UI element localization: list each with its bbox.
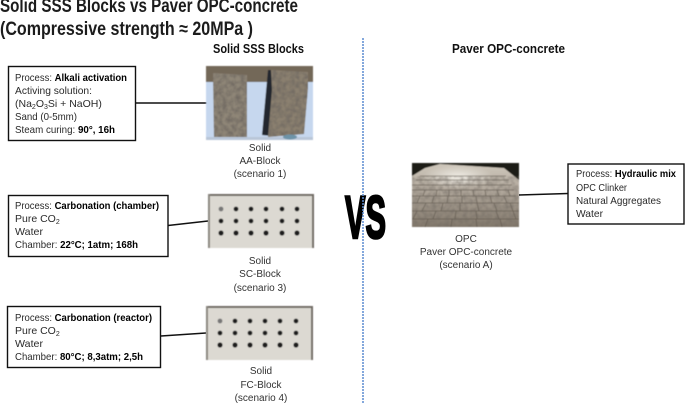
caption: FC-Block: FC-Block: [240, 380, 283, 391]
caption: paver OPC-concrete: (scenario A): [439, 260, 493, 271]
process box: carbonation reactor: Pure CO: [15, 325, 56, 337]
caption: SC-Block: SC-Block: [239, 269, 282, 280]
process box: alkali activation: O: [36, 98, 44, 110]
VS label: VS: [345, 184, 386, 251]
connector: paver to hydraulic mix: [519, 194, 568, 195]
process box: hydraulic mix: OPC Clinker: [576, 182, 627, 194]
process box: carbonation reactor: Water: [15, 338, 43, 350]
photo: AA-Block: [206, 66, 313, 140]
process box: alkali activation: (Na: [15, 98, 32, 110]
process box: carbonation chamber: Water: [15, 226, 43, 238]
process box: carbonation chamber: Chamber: 22°C; 1atm; 168h: [15, 239, 138, 251]
vertical dotted divider: [362, 38, 364, 403]
caption: AA-Block: Solid: [249, 143, 271, 154]
process box: alkali activation: Sand (0-5mm): [15, 111, 77, 123]
heading: Paver OPC-concrete: Paver OPC-concrete: [452, 42, 565, 56]
process box: carbonation reactor: Process: Carbonation (reactor): [15, 312, 152, 324]
connector: alkali activation to AA-Block: [135, 102, 207, 104]
process box: hydraulic mix: Process: Hydraulic mix: [576, 168, 676, 180]
process box: carbonation reactor: 2: [56, 331, 60, 338]
photo: paver surface: [412, 163, 519, 227]
process box: carbonation chamber: 2: [56, 219, 60, 226]
caption: AA-Block: AA-Block: [239, 156, 282, 167]
photo: FC-Block plate: [206, 306, 313, 360]
process box: hydraulic mix: Natural Aggregates: [576, 195, 661, 207]
caption: SC-Block: Solid: [249, 256, 271, 267]
caption: SC-Block: [234, 256, 286, 294]
process box: alkali activation: Activing solution:: [15, 85, 92, 97]
caption: AA-Block: [234, 143, 286, 180]
process box: alkali activation: Process: Alkali activation: [15, 72, 127, 84]
process box: alkali activation: 2: [32, 104, 36, 111]
process box: alkali activation: Si + NaOH): [48, 98, 102, 110]
process box: carbonation reactor: [8, 306, 160, 368]
caption: SC-Block: (scenario 3): [234, 283, 286, 294]
process box: carbonation chamber: Pure CO: [15, 213, 56, 225]
title: [0, 0, 298, 40]
caption: FC-Block: [235, 366, 287, 403]
caption: AA-Block: (scenario 1): [234, 169, 286, 180]
connector: reactor carbonation to FC-Block: [161, 333, 206, 336]
process box: carbonation chamber: [8, 196, 168, 256]
process box: alkali activation: Steam curing: 90°, 16h: [15, 124, 115, 136]
process box: hydraulic mix: Water: [576, 208, 603, 220]
process box: carbonation reactor: Chamber: 80°C; 8,3atm; 2,5h: [15, 351, 143, 363]
caption: paver OPC-concrete: Paver OPC-concrete: [420, 247, 513, 258]
connector: chamber carbonation to SC-Block: [168, 221, 208, 226]
process box: carbonation chamber: Process: Carbonation (chamber): [15, 200, 159, 212]
process box: alkali activation: [8, 66, 136, 140]
caption: paver OPC-concrete: [420, 234, 513, 271]
title: (Compressive strength ≈ 20MPa ): [0, 19, 253, 40]
process box: alkali activation: 3: [44, 104, 48, 111]
caption: paver OPC-concrete: OPC: [455, 234, 477, 245]
photo: SC-Block plate: [208, 194, 314, 248]
heading: Solid SSS Blocks: Solid SSS Blocks: [213, 42, 304, 56]
caption: FC-Block: Solid: [250, 366, 272, 377]
process box: hydraulic mix: [568, 164, 684, 224]
